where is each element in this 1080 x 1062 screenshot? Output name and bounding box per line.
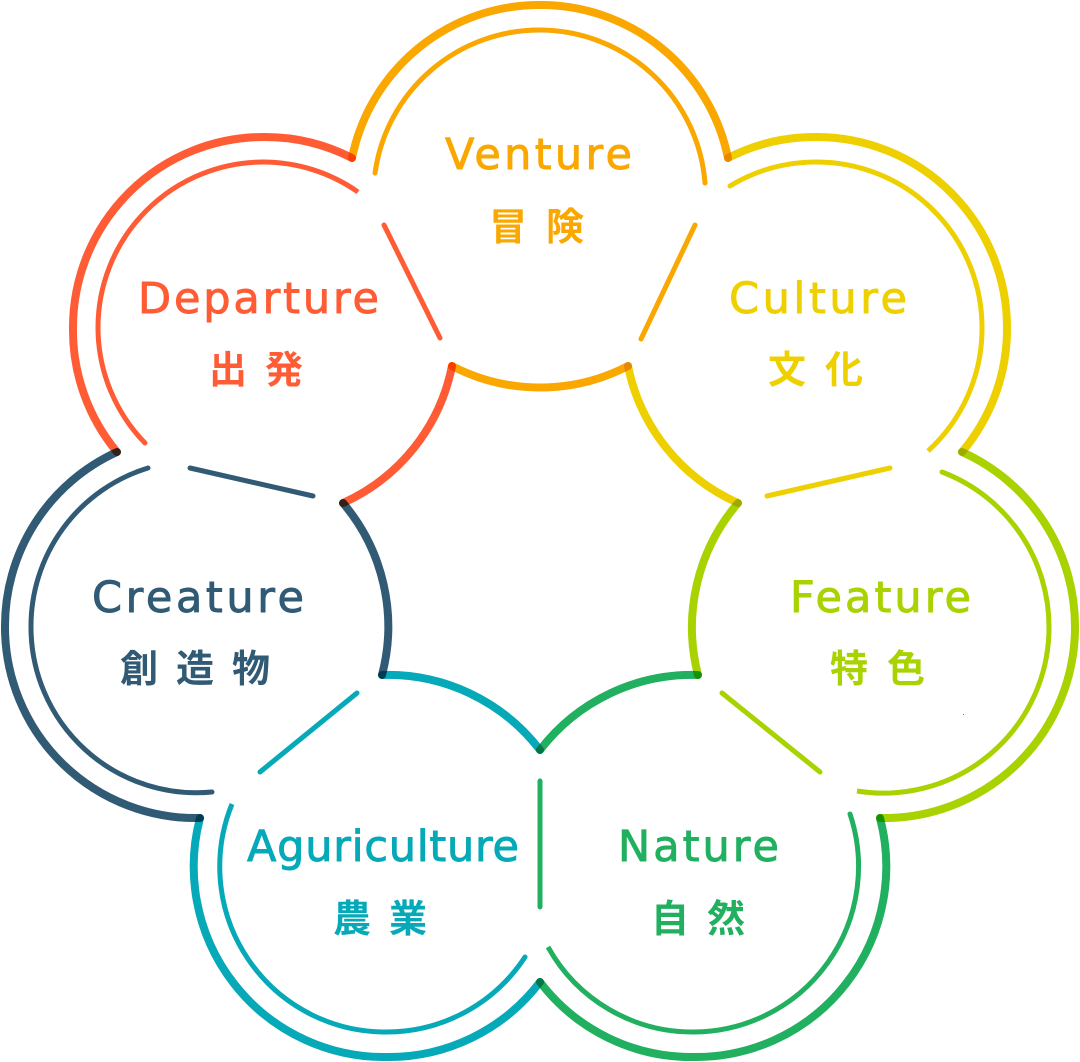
heading: Venture: Venture xyxy=(445,130,632,180)
panel: Feature xyxy=(692,452,1075,818)
outer arc: Culture xyxy=(728,137,1007,452)
divider line: Aguriculture xyxy=(260,693,357,772)
divider line: Departure xyxy=(384,225,440,338)
upper arc: Aguriculture xyxy=(382,675,540,750)
panel: Creature xyxy=(5,452,388,818)
inner arc: Creature xyxy=(31,468,212,793)
right arc: Creature xyxy=(343,503,388,675)
panel: Departure xyxy=(73,137,452,503)
heading: Aguriculture: Aguriculture xyxy=(247,822,519,872)
inner arc: Nature xyxy=(548,814,859,1032)
inner arc: Culture xyxy=(730,162,982,451)
outer arc: Departure xyxy=(73,137,352,452)
panel: Venture xyxy=(352,5,728,387)
panel: Culture xyxy=(628,137,1007,503)
divider line: Creature xyxy=(190,468,313,496)
divider line: Culture xyxy=(767,468,890,496)
heading: Culture: Culture xyxy=(729,274,907,324)
heading: Nature: Nature xyxy=(618,822,779,872)
outer arc: Nature xyxy=(540,818,886,1057)
Japanese label: Departure: 出発 xyxy=(209,350,303,392)
outer arc: Venture xyxy=(352,5,728,158)
heading: Departure: Departure xyxy=(138,274,379,324)
left arc: Feature xyxy=(692,503,738,675)
inner arc: Departure xyxy=(98,162,358,446)
inner arc: Venture xyxy=(375,30,705,183)
upper arc: Nature xyxy=(540,675,698,750)
panel: Nature xyxy=(540,675,886,1057)
Japanese label: Creature: 創造物 xyxy=(120,649,270,691)
lower arc: Departure xyxy=(343,366,452,503)
divider line: Feature xyxy=(722,693,820,772)
Japanese label: Feature: 特色 xyxy=(830,649,925,691)
heading: Feature: Feature xyxy=(790,573,971,623)
inner arc: Feature xyxy=(857,472,1049,793)
divider line: Venture xyxy=(641,225,695,339)
divider line: Nature xyxy=(538,781,542,907)
lower arc: Culture xyxy=(628,366,738,503)
outer arc: Aguriculture xyxy=(194,818,540,1057)
Japanese label: Venture: 冒険 xyxy=(489,207,584,249)
outer arc: Creature xyxy=(5,452,200,818)
heading: Creature: Creature xyxy=(92,573,304,623)
Japanese label: Culture: 文化 xyxy=(768,350,863,392)
Japanese label: Nature: 自然 xyxy=(651,899,745,941)
panel: Aguriculture xyxy=(194,675,540,1057)
inner arc: Aguriculture xyxy=(220,804,525,1032)
lower arc: Venture xyxy=(452,366,628,387)
outer arc: Feature xyxy=(880,452,1075,818)
Japanese label: Aguriculture: 農業 xyxy=(333,899,427,941)
